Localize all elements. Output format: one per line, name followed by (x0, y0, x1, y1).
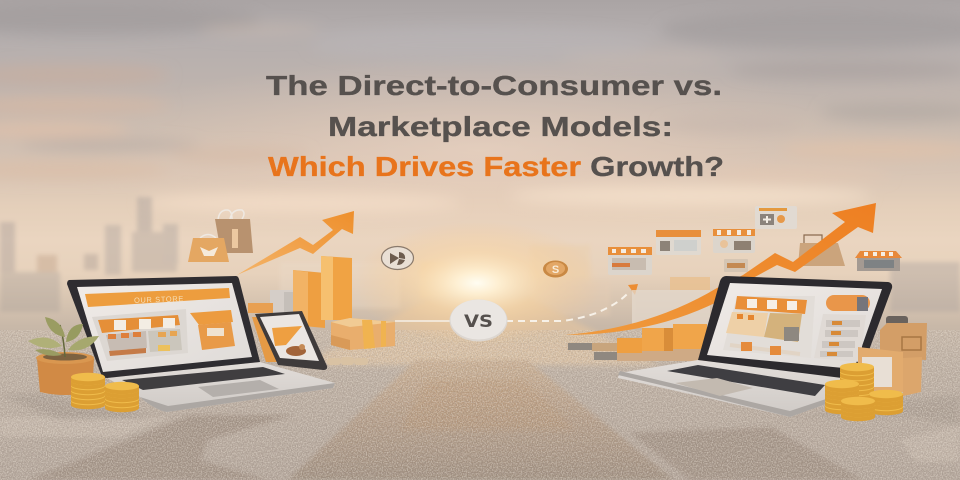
marketplace card 2 (656, 230, 701, 255)
shopping bag brown (215, 210, 253, 253)
orange road tint (400, 380, 575, 430)
vs badge (450, 300, 508, 342)
potted plant (28, 317, 99, 395)
title (266, 70, 724, 182)
laptop front edge (140, 383, 335, 412)
bar 2 (321, 256, 352, 320)
storefront panel (92, 309, 188, 361)
trackpad (675, 378, 753, 396)
store grid panel (723, 296, 815, 358)
small discs (327, 357, 368, 365)
title line 1: The Direct-to-Consumer vs. (266, 70, 722, 101)
coin stack 2 (105, 382, 139, 412)
gift box (331, 318, 395, 350)
vs connector lines (395, 284, 638, 321)
slabs (568, 343, 617, 360)
central road (288, 360, 674, 480)
title line 2: Marketplace Models: (328, 111, 673, 142)
our store banner (85, 288, 230, 307)
small orange boxes behind tablet (248, 303, 277, 362)
light ground patch right (900, 425, 960, 462)
right side: marketplace (565, 203, 927, 421)
floating dollar coin: S (552, 264, 559, 276)
box large (673, 324, 707, 361)
market stall card (855, 251, 902, 271)
ground speckle texture (0, 330, 960, 480)
box front (858, 347, 903, 392)
coin stack right (869, 390, 903, 415)
marketplace card 4 (755, 206, 797, 229)
stepped boxes (568, 324, 707, 361)
tablet (255, 311, 327, 370)
sun glow on the horizon (352, 221, 602, 345)
coin stack left (825, 380, 859, 414)
growth arrow left (237, 211, 354, 275)
floating chart icon (382, 246, 414, 270)
right road wedge (630, 427, 863, 480)
vs badge: VS (464, 312, 493, 331)
box top (880, 316, 927, 360)
shadow under right laptop (790, 395, 960, 425)
screen (77, 283, 252, 372)
promo box panel (190, 310, 235, 350)
laptop base (618, 360, 850, 417)
laptop left (67, 276, 335, 412)
screen (707, 283, 882, 369)
coin stack front (841, 397, 875, 421)
shopping bag right (798, 235, 845, 266)
grey box (270, 290, 302, 321)
marketplace card 3 (713, 229, 755, 253)
coin stack 1 (71, 373, 105, 409)
box side (903, 357, 922, 396)
road glow near horizon (300, 298, 660, 365)
laptop lid (698, 276, 892, 380)
keyboard (122, 367, 285, 390)
bar 1 (293, 270, 325, 328)
cardboard boxes right (858, 316, 927, 396)
our store banner: OUR STORE (134, 294, 184, 305)
light ground patch left (0, 417, 170, 437)
marketplace card small (724, 259, 748, 272)
bar 1 side (293, 270, 308, 327)
left side: direct-to-consumer (28, 210, 395, 412)
laptop front edge (618, 371, 826, 417)
title line 3: Which Drives Faster Growth? (268, 151, 724, 182)
background crate (632, 277, 710, 328)
floating dollar coin (543, 260, 568, 278)
laptop lid (67, 276, 260, 378)
marketplace card 1 (608, 247, 652, 275)
left road wedge (28, 415, 294, 480)
bar chart columns (293, 256, 352, 328)
growth arrow right (565, 203, 876, 335)
trackpad (198, 380, 279, 397)
button and list panel (814, 295, 870, 362)
shopping bag orange envelope (188, 234, 229, 262)
coin stack top (840, 363, 874, 400)
bar 2 side (321, 256, 333, 320)
box medium (642, 328, 673, 361)
road perspective (0, 298, 960, 480)
laptop right (618, 276, 892, 417)
shadow under left laptop (0, 394, 160, 420)
keyboard (667, 365, 825, 396)
laptop base (107, 362, 335, 412)
box small (617, 338, 642, 361)
